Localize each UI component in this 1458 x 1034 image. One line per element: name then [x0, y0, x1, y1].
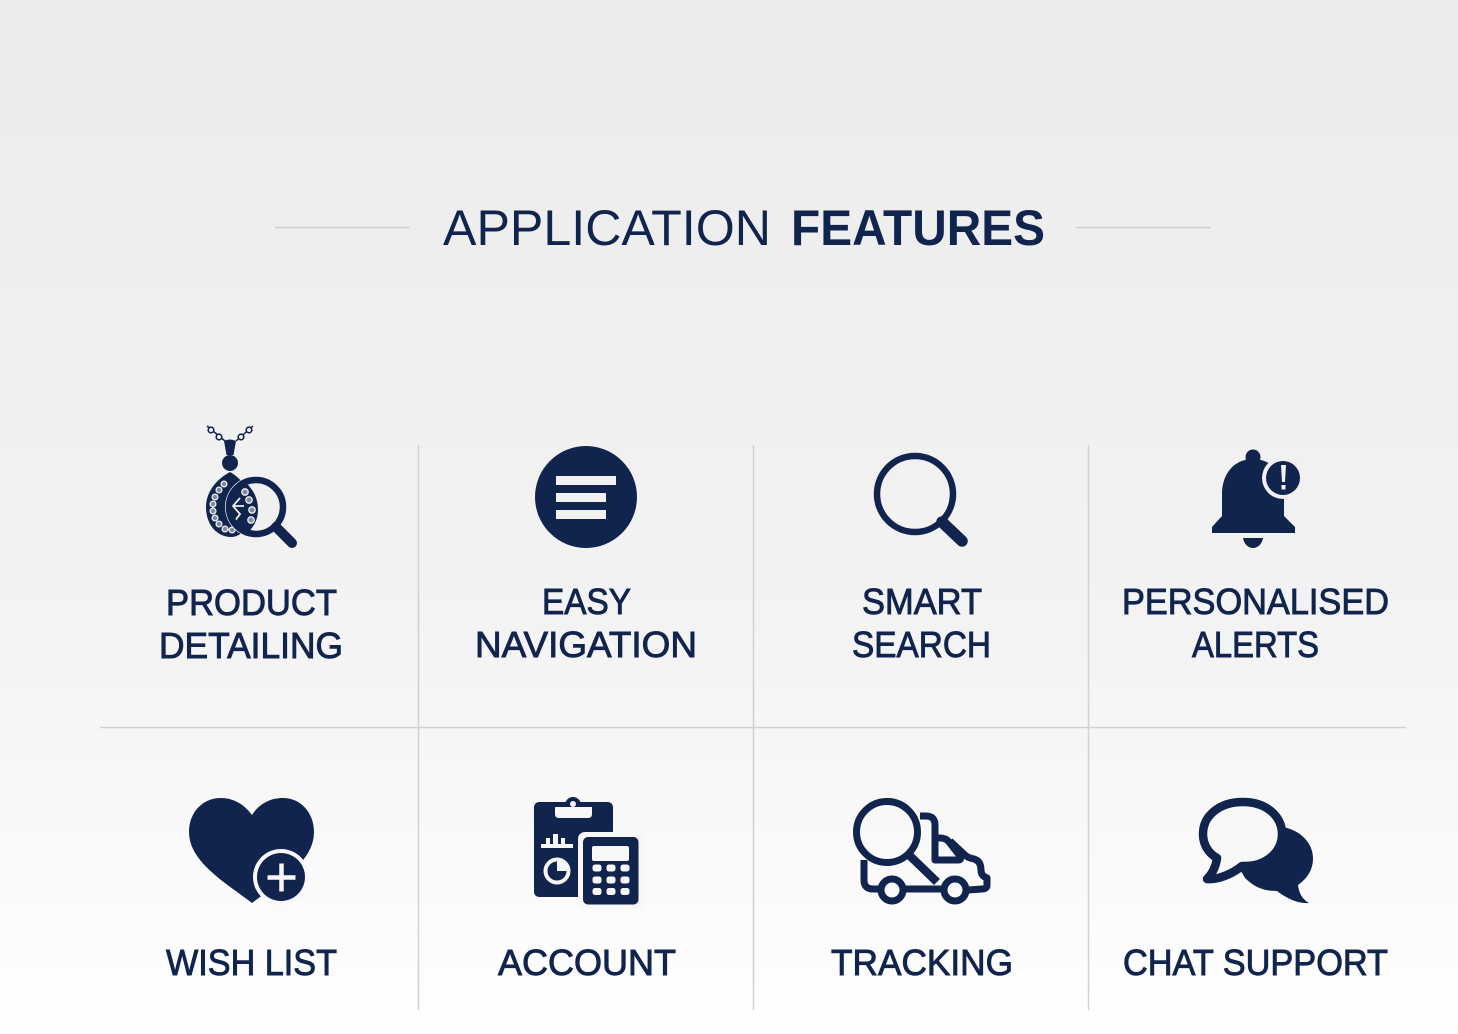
- label: chat support: CHAT SUPPORT: [1123, 942, 1388, 983]
- icon: pendant with magnifying glass: [206, 426, 292, 543]
- label: easy navigation: EASY: [542, 581, 631, 622]
- panel: personalised alerts: [1122, 450, 1389, 665]
- panel: account: [498, 797, 676, 983]
- icon: bell with alert: [1212, 450, 1304, 548]
- label: easy navigation: [475, 581, 697, 665]
- panel: easy navigation: [475, 446, 697, 665]
- icon: truck with magnifying glass: [856, 802, 987, 901]
- title: [443, 200, 1045, 256]
- icon: menu: [535, 446, 637, 548]
- label: easy navigation: NAVIGATION: [475, 624, 697, 665]
- label: product detailing: DETAILING: [159, 625, 343, 666]
- label: personalised alerts: PERSONALISED: [1122, 581, 1389, 622]
- label: product detailing: PRODUCT: [166, 582, 337, 623]
- label: smart search: SMART: [862, 581, 982, 622]
- title: APPLICATION: [443, 200, 771, 256]
- panel: product detailing: [159, 426, 343, 666]
- label: product detailing: [159, 582, 343, 666]
- label: smart search: [852, 581, 991, 665]
- panel: tracking: [831, 802, 1013, 983]
- title: FEATURES: [791, 200, 1045, 256]
- panel: wish list: [166, 798, 337, 983]
- icon: magnifying glass: [877, 456, 962, 541]
- panel: chat support: [1123, 802, 1388, 983]
- label: personalised alerts: ALERTS: [1192, 624, 1319, 665]
- label: account: ACCOUNT: [498, 942, 676, 983]
- label: wish list: WISH LIST: [166, 942, 337, 983]
- icon: chat bubbles: [1203, 802, 1313, 903]
- icon: clipboard and calculator: [534, 797, 644, 909]
- label: tracking: TRACKING: [831, 942, 1013, 983]
- label: personalised alerts: [1122, 581, 1389, 665]
- panel: smart search: [852, 456, 991, 665]
- icon: heart with plus: [189, 798, 314, 905]
- label: smart search: SEARCH: [852, 624, 991, 665]
